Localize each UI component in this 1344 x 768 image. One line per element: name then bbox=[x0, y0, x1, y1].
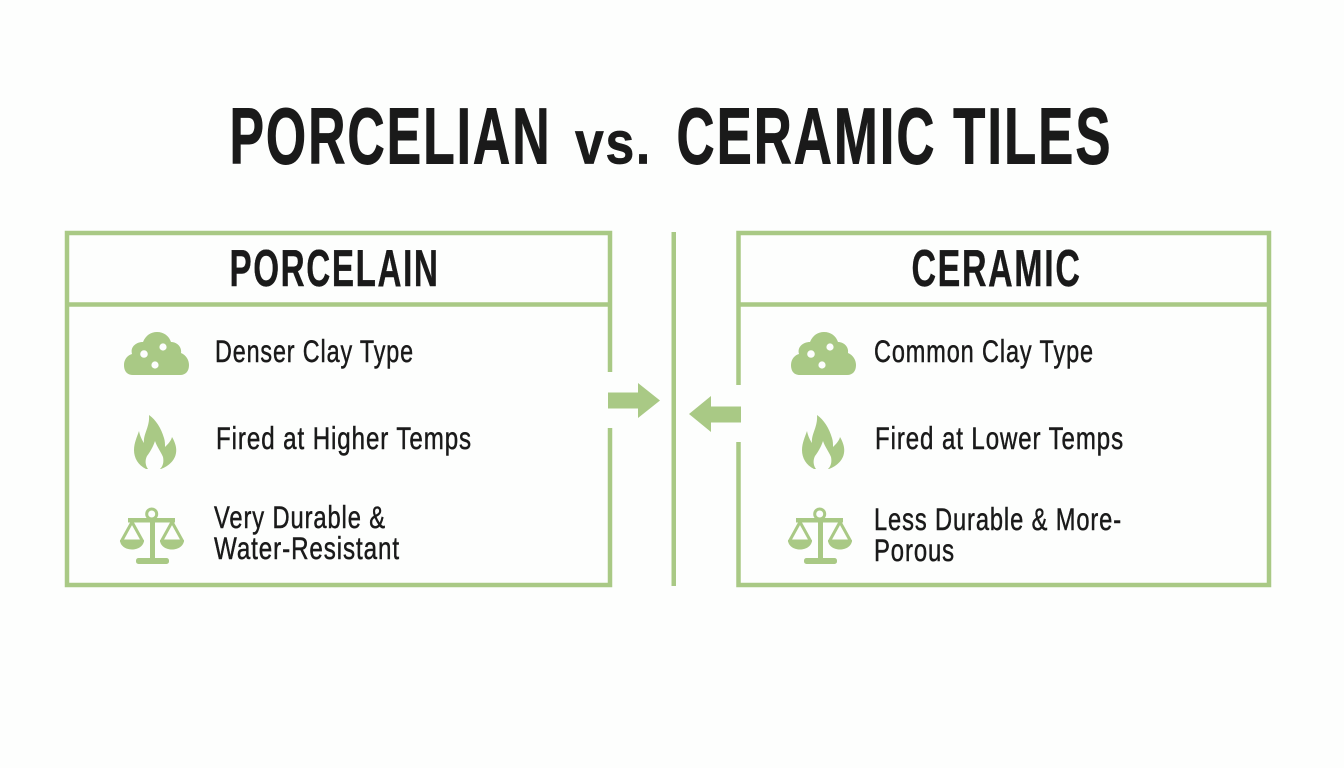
text: fired at lower temps: Fired at Lower Temps bbox=[875, 420, 1124, 456]
panel: ceramic bbox=[738, 233, 1269, 585]
arrow: porcelain toward divider bbox=[608, 383, 660, 418]
icon: flame bbox=[802, 415, 844, 469]
heading: ceramic: CERAMIC bbox=[912, 240, 1082, 298]
text: less durable and more porous: Porous bbox=[874, 532, 955, 568]
text: very durable and water-resistant: Water-Resistant bbox=[214, 530, 400, 566]
heading: porcelain: PORCELAIN bbox=[230, 240, 440, 298]
text: less durable and more porous bbox=[874, 501, 1122, 568]
icon: flame bbox=[134, 415, 176, 469]
panel frame: porcelain bbox=[67, 233, 610, 585]
text: very durable and water-resistant bbox=[214, 499, 400, 566]
panel frame: ceramic bbox=[738, 233, 1269, 585]
text: less durable and more porous: Less Durable & More- bbox=[874, 501, 1122, 537]
text: very durable and water-resistant: Very Durable & bbox=[214, 499, 386, 535]
text: common clay type: Common Clay Type bbox=[874, 333, 1094, 369]
title bbox=[230, 92, 1112, 180]
title: PORCELIAN bbox=[230, 92, 552, 180]
title: vs. bbox=[575, 110, 652, 176]
text: fired at higher temps: Fired at Higher Temps bbox=[216, 420, 472, 456]
title: CERAMIC TILES bbox=[676, 92, 1112, 180]
icon: clay cloud bbox=[124, 332, 189, 375]
icon: balance scale bbox=[788, 509, 852, 564]
icon: balance scale bbox=[120, 509, 184, 564]
arrow: ceramic toward divider bbox=[689, 396, 741, 432]
text: denser clay type: Denser Clay Type bbox=[215, 333, 414, 369]
panel: porcelain bbox=[67, 233, 610, 585]
center divider bbox=[672, 232, 676, 586]
icon: clay cloud bbox=[791, 332, 856, 375]
